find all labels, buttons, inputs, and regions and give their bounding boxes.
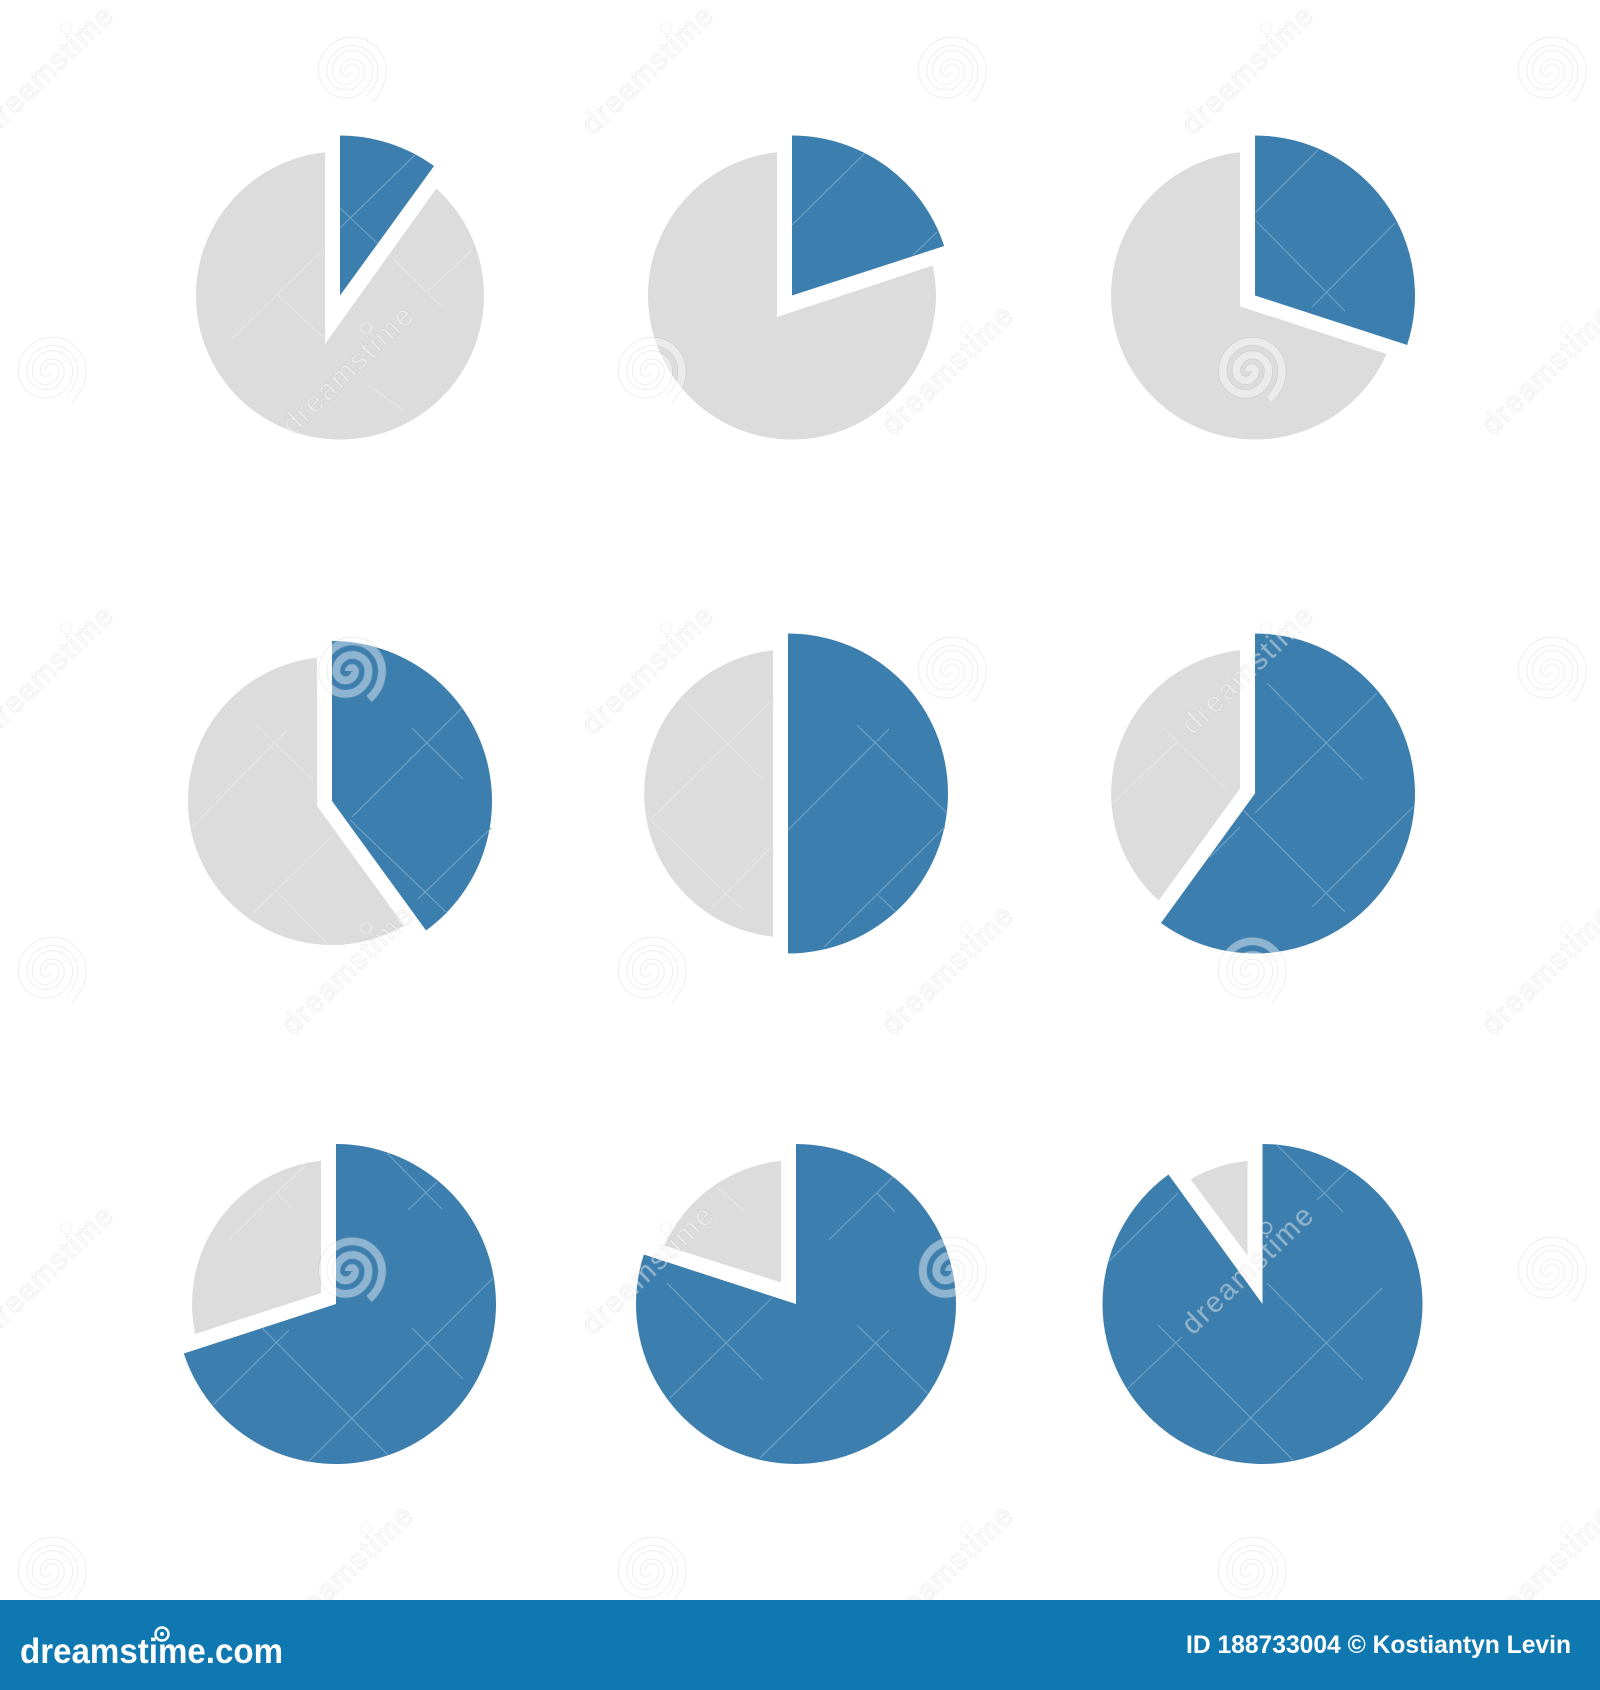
watermark text: dreamstime (275, 900, 420, 1041)
footer logo: dreamstime.com (20, 1632, 283, 1671)
watermark text: dreamstime (575, 600, 720, 741)
watermark text: dreamstime (1175, 0, 1320, 141)
watermark text: dreamstime (875, 300, 1020, 441)
pie chart: 60 percent (1111, 634, 1415, 954)
pie chart: 30 percent (1111, 136, 1415, 440)
pie chart: 20 percent (648, 136, 944, 440)
pie chart: 70 percent (184, 1144, 496, 1464)
pie chart: 80 percent (636, 1144, 956, 1464)
watermark text: dreamstime (1175, 600, 1320, 741)
pie chart: 50 percent (644, 634, 948, 954)
footer bar (0, 1600, 1600, 1690)
pie chart: 40 percent (188, 641, 492, 945)
footer credit: ID 188733004 © Kostiantyn Levin (1186, 1631, 1571, 1659)
watermark text: dreamstime (1175, 1200, 1320, 1341)
watermark text: dreamstime (575, 1200, 720, 1341)
watermark text: dreamstime (275, 1500, 420, 1641)
pie chart: 90 percent (1102, 1144, 1422, 1464)
pie chart: 10 percent (196, 136, 484, 440)
watermark text: dreamstime (875, 1500, 1020, 1641)
watermark text: dreamstime (575, 0, 720, 141)
watermark text: dreamstime (875, 900, 1020, 1041)
watermark text: dreamstime (275, 300, 420, 441)
